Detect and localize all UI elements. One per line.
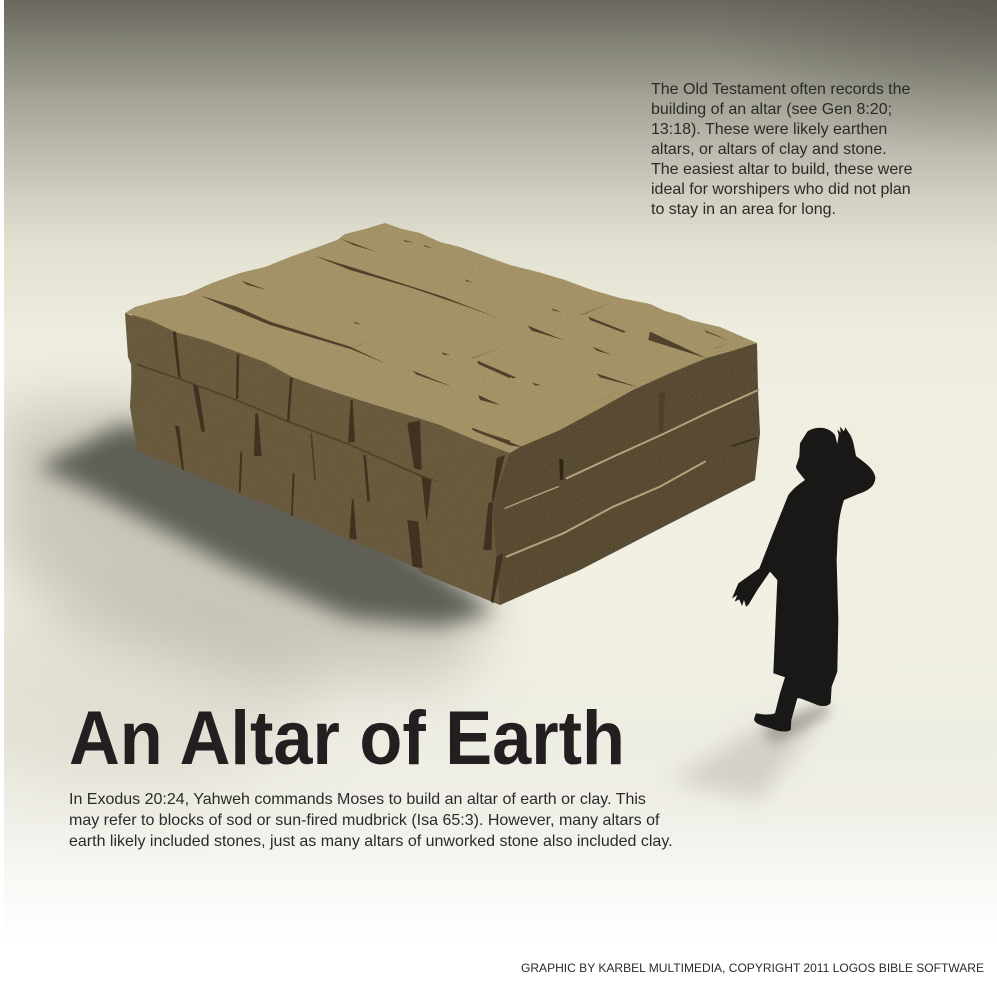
title: An Altar of Earth: [69, 696, 625, 781]
altar front face: [125, 313, 510, 605]
text block: old testament altars: The Old Testament often records the: [651, 81, 910, 98]
cream mortar lines: [505, 390, 758, 557]
text block: old testament altars: The easiest altar to build, these were: [651, 161, 913, 178]
text block: old testament altars: [651, 81, 913, 218]
top face cracks: left section: [200, 238, 510, 443]
right face cracks and mortar lines: [505, 390, 758, 557]
text block: exodus description: may refer to blocks of sod or sun-fired mudbrick (Isa 65:3). However, many altars of: [69, 812, 660, 829]
text block: exodus description: In Exodus 20:24, Yahweh commands Moses to build an altar of earth or clay. This: [69, 791, 646, 808]
front face cracks: [137, 332, 505, 603]
altar of earth: [125, 223, 760, 605]
altar right face: [492, 343, 760, 605]
text block: old testament altars: ideal for worshipers who did not plan: [651, 181, 911, 198]
top face cracks: right section: [413, 302, 733, 447]
text block: old testament altars: 13:18). These were likely earthen: [651, 121, 887, 138]
altar base: [130, 235, 758, 603]
credit line: GRAPHIC BY KARBEL MULTIMEDIA, COPYRIGHT 2011 LOGOS BIBLE SOFTWARE: [521, 961, 984, 975]
text block: old testament altars: altars, or altars of clay and stone.: [651, 141, 887, 158]
text block: exodus description: [69, 791, 673, 850]
altar top face: [125, 223, 757, 453]
figure shadow: [670, 702, 830, 800]
figure of a worshiper: [732, 427, 875, 732]
altar shadow: [0, 400, 500, 680]
text block: old testament altars: to stay in an area for long.: [651, 201, 836, 218]
text block: old testament altars: building of an altar (see Gen 8:20;: [651, 101, 892, 118]
text block: exodus description: earth likely included stones, just as many altars of unworked stone also included clay.: [69, 833, 673, 850]
left margin strip: [0, 0, 4, 996]
